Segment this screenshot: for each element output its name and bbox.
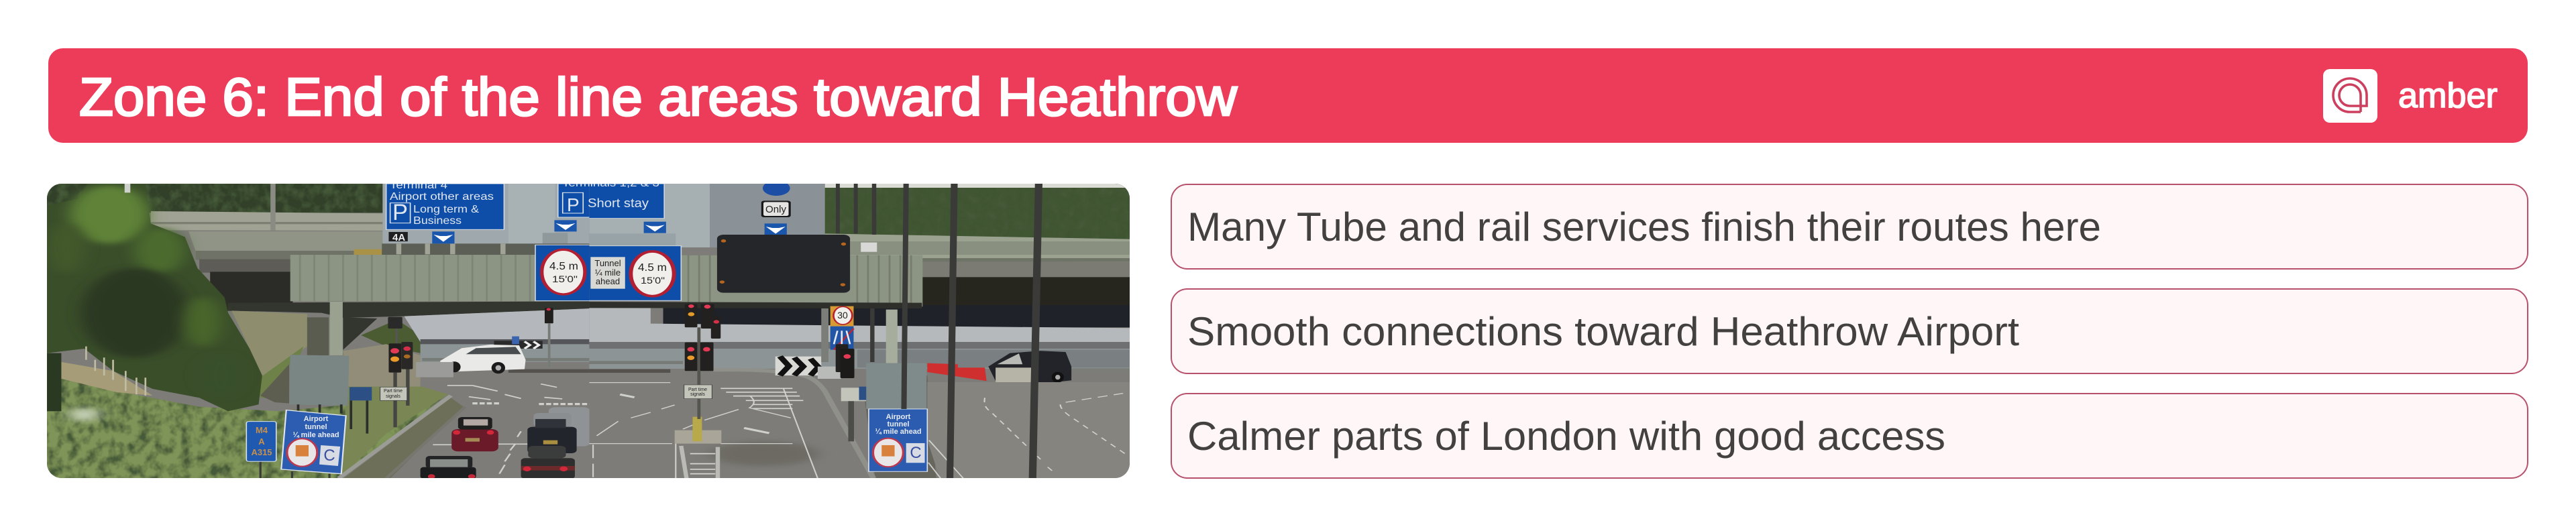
traffic island xyxy=(675,430,721,444)
gantry xyxy=(681,255,922,306)
card text: Calmer parts of London with good access xyxy=(1187,414,1945,459)
grey back panel xyxy=(866,363,926,409)
roadside signs xyxy=(393,373,397,427)
card text: Smooth connections toward Heathrow Airport xyxy=(1187,309,2019,354)
sign lettering in the photo: Airport xyxy=(304,415,329,423)
sign lettering in the photo: Only xyxy=(765,204,787,215)
sign lettering in the photo: 15'0" xyxy=(552,274,578,284)
sign lettering in the photo: Airport other areas xyxy=(390,191,494,202)
left half of the scene xyxy=(47,184,601,479)
right half of the scene xyxy=(541,180,1130,479)
sign lettering in the photo: 4.5 m xyxy=(638,262,667,274)
grey signs backing xyxy=(577,184,710,247)
sign lettering in the photo: signals xyxy=(386,394,400,399)
sign lettering in the photo: signals xyxy=(690,392,705,397)
sign lettering in the photo: Airport xyxy=(886,413,911,421)
header banner xyxy=(48,48,2528,143)
sign lettering in the photo: C xyxy=(323,447,335,465)
sign lettering in the photo: Business xyxy=(413,215,462,227)
chevrons xyxy=(775,357,821,375)
sign lettering in the photo: Tunnel xyxy=(594,258,621,268)
sign lettering in the photo: 30 xyxy=(837,310,848,320)
posts xyxy=(697,327,700,419)
title: Zone 6: End of the line areas toward Heathrow xyxy=(79,67,1237,127)
cars xyxy=(421,407,590,479)
tree xyxy=(47,184,262,411)
road markings left xyxy=(433,384,590,474)
sign lettering in the photo: P xyxy=(392,200,408,225)
sign lettering in the photo: Part time xyxy=(688,388,707,392)
pillar xyxy=(886,310,898,363)
lamp poles xyxy=(838,184,1038,478)
sign lettering in the photo: Part time xyxy=(384,389,402,394)
VMS board xyxy=(717,235,850,293)
sign lettering in the photo: 4.5 m xyxy=(549,261,578,272)
sign lettering in the photo: ¼ mile ahead xyxy=(875,428,922,436)
sign lettering in the photo: ¼ mile xyxy=(595,268,621,278)
sign lettering in the photo: ahead xyxy=(596,276,620,286)
road xyxy=(589,382,590,383)
sign lettering in the photo: Terminal 4 xyxy=(390,180,447,191)
guard rail xyxy=(714,369,873,478)
card text: Many Tube and rail services finish their routes here xyxy=(1187,204,2101,249)
sign lettering in the photo: 15'0" xyxy=(641,275,665,286)
sign lettering in the photo: ¼ mile ahead xyxy=(292,431,339,439)
photo: Heathrow road approach with tunnel signs xyxy=(47,178,1130,479)
motorway end sign xyxy=(830,327,853,350)
logo wordmark: amber xyxy=(2398,76,2498,115)
sign lettering in the photo: C xyxy=(910,444,922,462)
tunnel height sign xyxy=(589,245,682,301)
big overhead signs backing xyxy=(382,184,591,244)
airport tunnel sign right xyxy=(869,409,927,471)
guard rail and kerb xyxy=(339,396,451,478)
sign lettering in the photo: Long term & xyxy=(413,204,479,215)
zebra hatching xyxy=(690,388,803,474)
icon: amber spiral mark xyxy=(2333,78,2367,112)
sign lettering in the photo: M4 xyxy=(256,425,268,435)
camera xyxy=(861,243,877,252)
road markings xyxy=(588,383,1125,478)
grass bank xyxy=(47,375,447,479)
card: Heathrow connections xyxy=(1171,289,2528,373)
sign lettering in the photo: A315 xyxy=(251,447,272,457)
card: services finish xyxy=(1171,184,2528,269)
sign lettering in the photo: tunnel xyxy=(305,423,327,431)
gantry beam xyxy=(290,255,538,301)
chevron board and white car xyxy=(494,341,543,349)
30 sign xyxy=(830,306,853,327)
traffic lights xyxy=(685,304,855,378)
sign lettering in the photo: Terminals 1,2 & 3 xyxy=(562,178,659,189)
sign lettering in the photo: P xyxy=(567,194,580,215)
card: calmer parts xyxy=(1171,394,2528,478)
sign lettering in the photo xyxy=(251,178,922,465)
sign lettering in the photo: A xyxy=(258,436,265,447)
sign lettering in the photo: tunnel xyxy=(887,420,910,428)
sign lettering in the photo: 4A xyxy=(392,232,405,243)
amber logo xyxy=(2323,69,2498,123)
sign lettering in the photo: Short stay xyxy=(588,196,649,210)
